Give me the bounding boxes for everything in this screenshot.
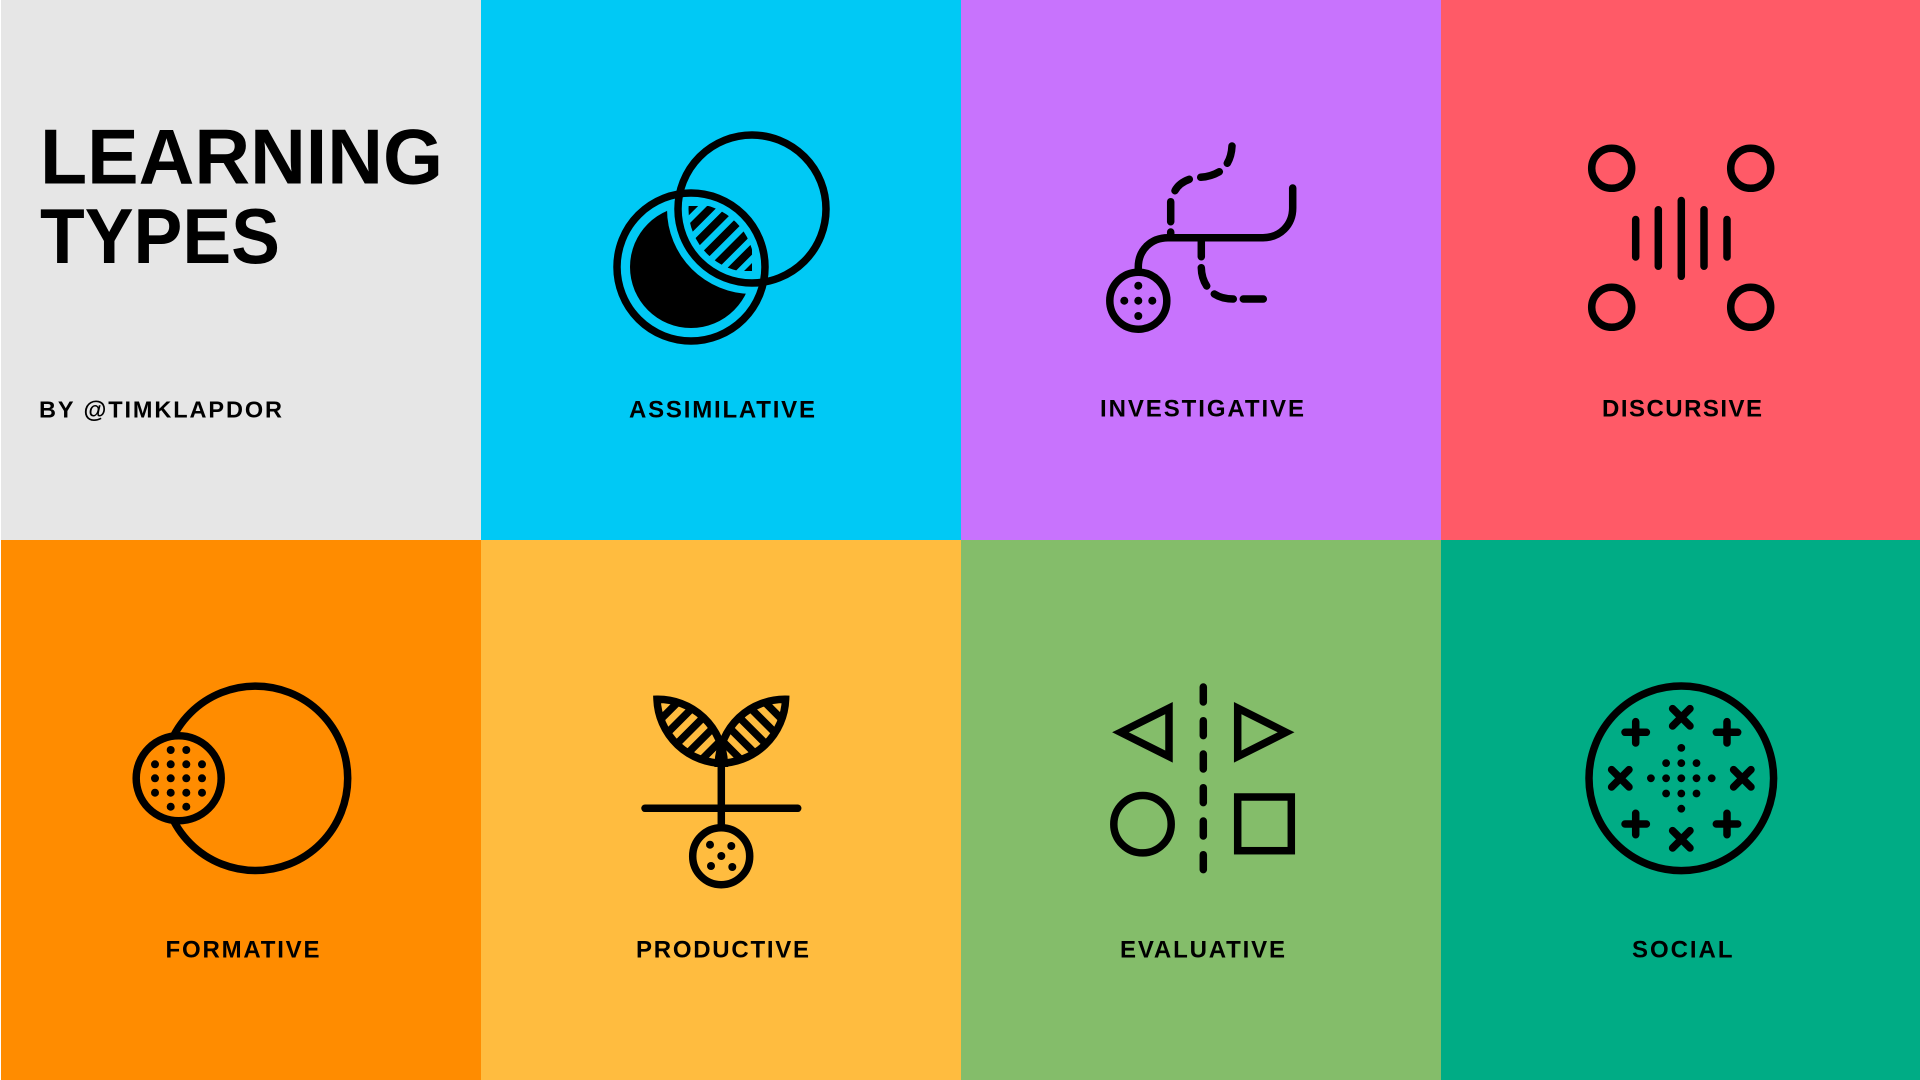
label: discursive: DISCURSIVE: [1602, 396, 1762, 423]
label: assimilative: ASSIMILATIVE: [629, 396, 815, 424]
label: formative: FORMATIVE: [166, 936, 320, 963]
panel: assimilative: [481, 0, 961, 540]
icon part: left leaf: [653, 696, 728, 767]
label: social: SOCIAL: [1632, 936, 1732, 963]
panel: formative: [1, 540, 481, 1080]
panel: social: [1441, 540, 1920, 1080]
panel: title: [1, 0, 481, 540]
icon: circle with plus, cross and dot marks: [1589, 686, 1774, 871]
icon: four circles and sound bars: [1592, 148, 1771, 327]
panel: discursive: [1441, 0, 1920, 540]
label: productive: PRODUCTIVE: [636, 936, 809, 963]
icon: sprouting seed: [641, 696, 802, 888]
icon: shapes either side of dashed line: [1114, 687, 1291, 870]
heading: types: TYPES: [40, 192, 280, 280]
icon: overlapping circles: [613, 131, 830, 345]
icon: small dotted circle on large circle: [136, 686, 348, 870]
label: evaluative: EVALUATIVE: [1120, 936, 1285, 963]
icon part: right leaf: [714, 696, 790, 767]
heading: learning: LEARNING: [40, 112, 443, 200]
icon: branching paths: [1110, 146, 1293, 329]
byline: BY @TIMKLAPDOR: [39, 396, 282, 422]
panel: evaluative: [961, 540, 1441, 1080]
label: investigative: INVESTIGATIVE: [1100, 396, 1304, 423]
panel: investigative: [961, 0, 1441, 540]
panel: productive: [481, 540, 961, 1080]
